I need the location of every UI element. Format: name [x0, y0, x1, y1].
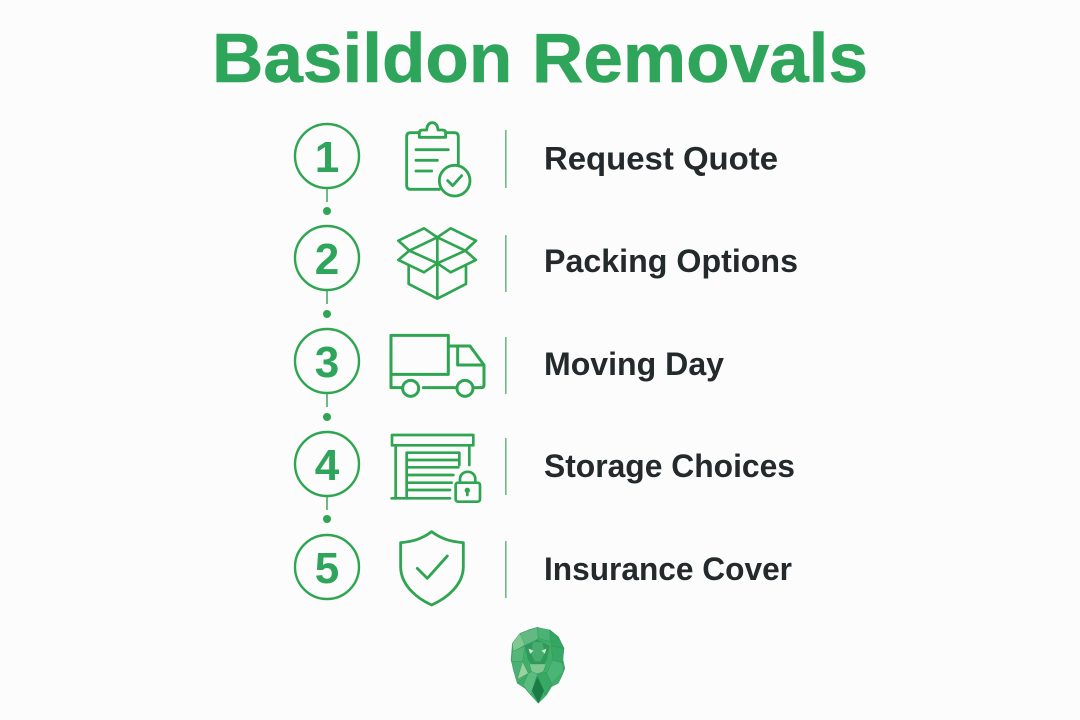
timeline connectors	[323, 188, 331, 523]
icon: shield with check	[401, 532, 463, 605]
title: Basildon Removals	[212, 19, 868, 97]
number badge 1	[295, 124, 359, 188]
step 4 row	[295, 432, 795, 502]
icon: removal truck	[391, 335, 484, 396]
step 5 row	[295, 532, 792, 605]
number badge 4: 4	[315, 441, 340, 490]
label: Request Quote	[544, 140, 778, 176]
number badge 3: 3	[315, 338, 339, 387]
divider	[505, 541, 507, 598]
icon: open box	[398, 228, 476, 299]
number badge 5: 5	[315, 544, 339, 593]
icon: storage unit with padlock	[392, 435, 480, 502]
step 3 row	[295, 329, 724, 396]
number badge 5	[295, 535, 359, 599]
label: Insurance Cover	[544, 551, 792, 587]
divider	[505, 130, 507, 188]
number badge 2: 2	[315, 235, 339, 284]
label: Packing Options	[544, 243, 798, 279]
label: Storage Choices	[544, 448, 795, 484]
number badge 1: 1	[315, 133, 339, 182]
divider	[505, 337, 507, 394]
divider	[505, 438, 507, 495]
label: Moving Day	[544, 346, 724, 382]
divider	[505, 235, 507, 292]
number badge 3	[295, 329, 359, 393]
number badge 4	[295, 432, 359, 496]
number badge 2	[295, 226, 359, 290]
step 2 row	[295, 226, 798, 299]
icon: clipboard with check	[407, 123, 470, 196]
step 1 row	[295, 123, 778, 196]
icon: polygonal green lion head logo	[511, 627, 565, 703]
